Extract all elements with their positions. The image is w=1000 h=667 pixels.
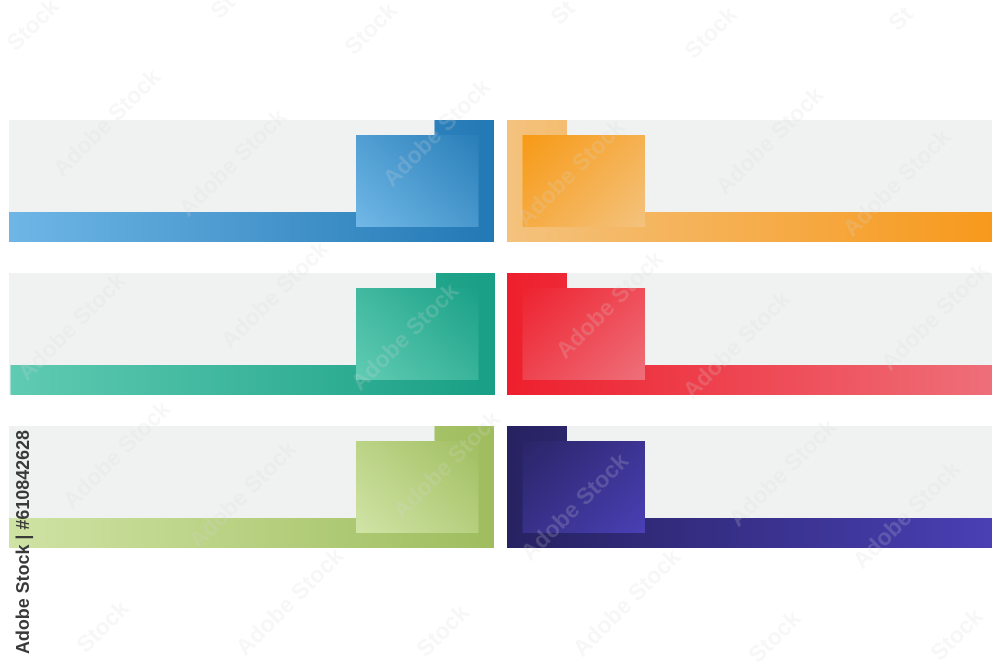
watermark pattern: Adobe Stock [511, 113, 629, 231]
panel: navy folder banner [507, 426, 992, 548]
watermark pattern: Adobe Stock [550, 245, 668, 363]
watermark pattern: Stock [679, 1, 742, 64]
watermark pattern: Adobe Stock [567, 543, 685, 661]
panel: green folder banner [9, 426, 494, 548]
watermark pattern: Adobe Stock [183, 435, 301, 553]
watermark pattern: Adobe Stock [710, 81, 828, 199]
watermark pattern: Adobe Stock [377, 73, 495, 191]
panel: blue folder banner [9, 120, 494, 242]
stock credit: Adobe Stock | #610842628 [13, 430, 33, 654]
watermark pattern: Adobe Stock [173, 103, 291, 221]
watermark pattern: Stock [71, 595, 134, 658]
watermark pattern: Stock [411, 599, 474, 662]
watermark pattern: Adobe Stock [57, 395, 175, 513]
watermark pattern: Adobe Stock [215, 235, 333, 353]
watermark pattern: Adobe Stock [12, 267, 130, 385]
watermark pattern: Adobe Stock [837, 123, 955, 241]
watermark pattern: Adobe Stock [875, 257, 993, 375]
watermark pattern: Adobe Stock [387, 405, 505, 523]
watermark pattern: Adobe Stock [723, 413, 841, 531]
watermark pattern: St [883, 1, 918, 36]
watermark pattern: Stock [925, 603, 988, 666]
watermark pattern: Adobe Stock [847, 455, 965, 573]
watermark pattern: Adobe Stock [47, 63, 165, 181]
watermark pattern: Adobe Stock [345, 277, 463, 395]
panel: red folder banner [507, 273, 992, 395]
watermark pattern: Stock [743, 605, 806, 667]
watermark pattern: Adobe Stock [515, 447, 633, 565]
watermark pattern: Adobe Stock [677, 285, 795, 403]
panel: teal folder banner [9, 273, 495, 395]
panel: orange folder banner [507, 120, 992, 242]
watermark pattern: Adobe Stock [230, 542, 348, 660]
